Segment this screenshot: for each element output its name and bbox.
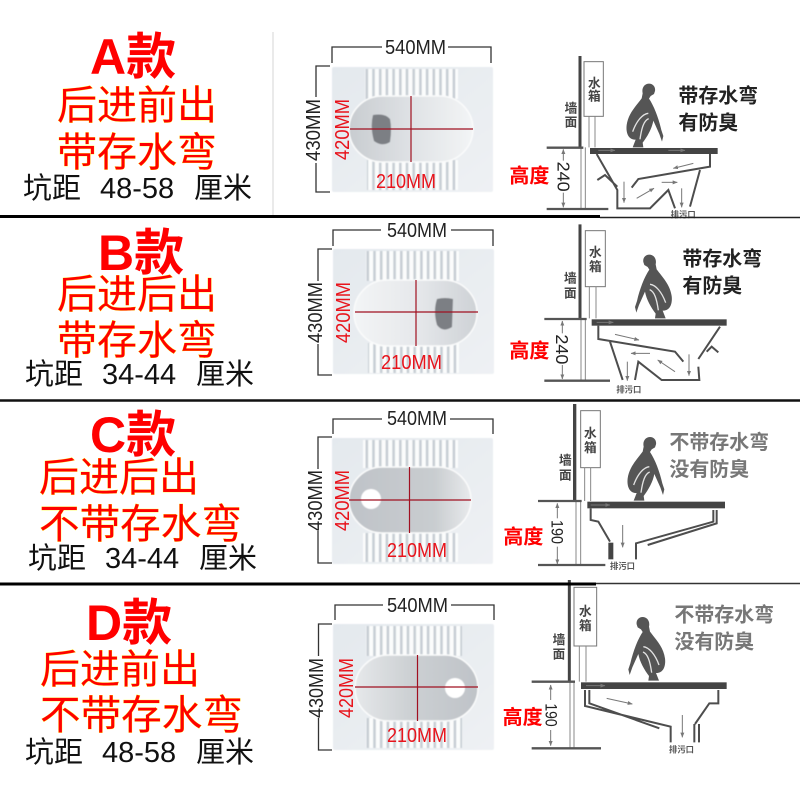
text: pit distance A: 48-58	[100, 173, 174, 205]
dimension 430MM	[305, 624, 332, 750]
dimension 540MM	[332, 36, 491, 63]
dimension 420MM: 420MM	[331, 470, 354, 531]
dimension 420MM: 420MM	[332, 282, 355, 343]
dimension 210MM: 210MM	[376, 170, 436, 193]
text: rear inlet rear outlet: 后进后出	[57, 273, 217, 317]
text: with water trap: 带存水弯	[57, 319, 217, 363]
note: no trap, no odor proofing	[674, 603, 774, 653]
text: pit distance C: 34-44	[105, 543, 179, 575]
height dimension B	[552, 321, 572, 379]
text: pit distance C: 坑距	[28, 543, 86, 575]
dimension 430MM: 430MM	[304, 282, 327, 343]
diagram: section view C	[503, 404, 769, 571]
height dimension C: 190	[548, 520, 567, 544]
product photo with dimensions: D	[305, 594, 494, 750]
note: no trap, no odor proofing: 不带存水弯	[669, 430, 769, 454]
floor and pipework D	[532, 682, 727, 748]
product photo with dimensions: A	[302, 36, 493, 193]
text: rear inlet rear outlet: 后进后出	[39, 456, 199, 500]
water tank D	[574, 587, 597, 682]
label: height A: 高度	[509, 164, 549, 188]
text: without water trap: 不带存水弯	[40, 692, 243, 738]
dimension 540MM: 540MM	[385, 36, 446, 59]
text: with water trap: 带存水弯	[57, 131, 217, 175]
panel: model B	[25, 219, 762, 394]
title: model D: D款	[86, 595, 172, 651]
text: without water trap: 不带存水弯	[39, 501, 242, 547]
dimension 210MM: 210MM	[387, 724, 447, 747]
text: pit distance B: 34-44	[102, 359, 176, 391]
note: with trap, odor proof	[678, 83, 758, 134]
water tank D: 水	[579, 604, 592, 619]
diagram: section view D	[503, 580, 774, 754]
height dimension D: 190	[542, 703, 561, 727]
text: pit distance B: 厘米	[196, 358, 254, 391]
ceramic pan B	[333, 249, 494, 374]
height dimension C	[548, 503, 567, 564]
text: pit distance A: 坑距	[23, 173, 81, 205]
dimension 430MM: 430MM	[304, 470, 327, 531]
squatting person B	[635, 255, 672, 318]
ceramic pan A	[332, 67, 493, 192]
dimension 210MM: 210MM	[387, 539, 447, 562]
wall A: 墙	[565, 101, 578, 116]
wall D: 墙	[553, 632, 566, 647]
water tank A	[584, 62, 603, 147]
wall D	[553, 580, 574, 748]
title: model A: A款	[90, 29, 176, 85]
note: with trap, odor proof: 带存水弯	[682, 247, 762, 271]
text: rear inlet front outlet: 后进前出	[57, 84, 217, 128]
wall C: 面	[559, 468, 572, 482]
dimension 420MM: 420MM	[331, 99, 354, 160]
note: no trap, no odor proofing: 没有防臭	[674, 630, 754, 653]
height dimension A: 240	[553, 162, 573, 192]
drain label C: 排污口	[610, 561, 635, 571]
text: pit distance D: 48-58	[102, 737, 176, 769]
text: pit distance D: 厘米	[196, 736, 254, 769]
drain label B: 排污口	[616, 384, 641, 394]
dimension 430MM	[302, 66, 330, 192]
label: height C: 高度	[503, 524, 543, 548]
text: pit distance D: 坑距	[25, 737, 83, 769]
dimension 540MM	[333, 407, 493, 434]
squatting person D	[628, 617, 665, 681]
ceramic pan C	[332, 438, 493, 564]
note: no trap, no odor proofing: 不带存水弯	[674, 603, 774, 627]
water tank B: 箱	[589, 259, 602, 274]
product photo with dimensions: C	[304, 407, 493, 564]
diagram: section view B	[509, 224, 762, 394]
squatting person C	[627, 437, 664, 501]
panel: model C	[28, 404, 769, 575]
text: pit distance C: 厘米	[199, 542, 257, 575]
water tank C: 水	[584, 425, 597, 440]
dimension 430MM: 430MM	[302, 99, 325, 161]
dimension 430MM	[304, 249, 332, 375]
squatting person A	[626, 84, 663, 147]
wall B	[564, 224, 585, 381]
dimension 540MM: 540MM	[387, 407, 447, 430]
wall D: 面	[553, 648, 566, 662]
height dimension D	[542, 685, 561, 746]
floor and trap pipework B	[544, 319, 727, 381]
label: height D: 高度	[503, 705, 543, 729]
dimension 420MM: 420MM	[335, 658, 358, 718]
text: rear inlet front outlet: 后进前出	[40, 648, 200, 692]
dimension 210MM: 210MM	[381, 351, 442, 374]
dimension 540MM	[335, 594, 494, 620]
floor and pipework C	[538, 501, 725, 565]
text: pit distance A: 厘米	[194, 172, 252, 205]
dimension 540MM: 540MM	[387, 219, 447, 242]
title: model B: B款	[98, 225, 184, 281]
dimension 430MM: 430MM	[305, 658, 328, 718]
wall C	[559, 404, 581, 565]
note: with trap, odor proof: 带存水弯	[678, 83, 758, 107]
water tank A: 箱	[588, 89, 601, 104]
drain label D: 排污口	[669, 744, 694, 754]
wall A	[565, 56, 585, 208]
diagram: section view A	[509, 56, 758, 219]
note: no trap, no odor proofing: 没有防臭	[669, 458, 749, 481]
water tank C	[581, 411, 600, 501]
product photo with dimensions: B	[304, 219, 494, 375]
note: with trap, odor proof: 有防臭	[678, 111, 738, 134]
wall B: 墙	[564, 271, 577, 286]
note: with trap, odor proof: 有防臭	[682, 275, 742, 298]
dimension 540MM: 540MM	[387, 594, 448, 617]
water tank A: 水	[588, 75, 601, 90]
floor and trap pipework A	[547, 148, 718, 209]
water tank C: 箱	[584, 440, 597, 455]
note: with trap, odor proof	[682, 247, 762, 298]
text: pit distance B: 坑距	[25, 359, 83, 391]
height dimension A	[553, 149, 573, 207]
wall C: 墙	[559, 453, 572, 468]
water tank B: 水	[589, 245, 602, 260]
height dimension B: 240	[552, 334, 572, 364]
dimension 430MM	[304, 437, 332, 563]
panel: model D	[25, 580, 774, 769]
dimension 540MM	[333, 219, 493, 246]
panel: model A	[23, 29, 758, 219]
wall A: 面	[565, 116, 578, 130]
title: model C: C款	[90, 407, 176, 463]
wall B: 面	[564, 287, 577, 301]
label: height B: 高度	[509, 339, 549, 363]
drain label A: 排污口	[671, 209, 696, 219]
ceramic pan D	[333, 624, 494, 750]
water tank D: 箱	[579, 618, 592, 633]
note: no trap, no odor proofing	[669, 430, 769, 481]
water tank B	[585, 231, 605, 318]
